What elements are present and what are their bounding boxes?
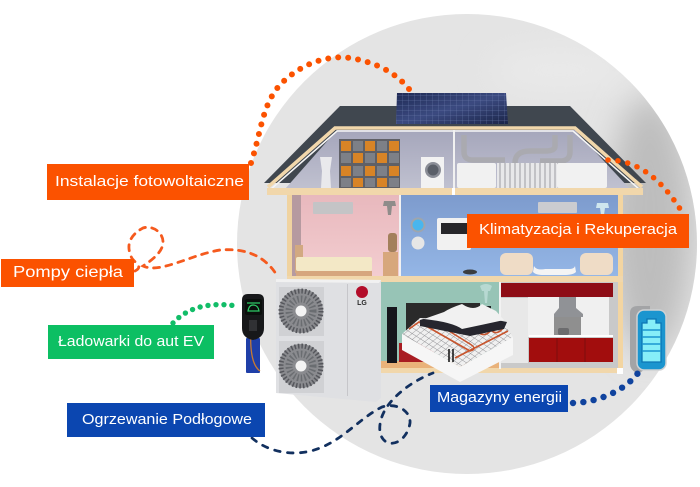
connector: EV chargers [173,305,237,323]
dresser and bear [383,233,398,276]
bed [295,245,372,276]
red bed cover [399,343,434,362]
attic interior [285,130,630,189]
label: energy storage: Magazyny energii [437,389,562,406]
cooker hood [554,297,583,317]
backsplash [554,315,581,335]
recuperator units [457,163,607,188]
battery icon [630,306,666,374]
heating pipes [409,318,508,358]
washing machine [421,157,444,188]
ventilation ducts [464,135,570,163]
connector: heat pumps [129,227,278,277]
connector: photovoltaics [251,57,409,163]
divider kitchen [499,282,501,369]
roof beam [268,128,642,187]
walls and slabs [267,188,643,374]
label: heat pumps [1,259,134,287]
vase [320,157,332,188]
house cross-section [264,93,646,374]
floor layers [420,311,507,336]
bedroom lower level [378,282,499,368]
attic divider [453,130,455,188]
armchairs and table [500,253,613,275]
lower cabinets [529,335,613,362]
label: energy storage [430,385,568,412]
lamp blue room [596,203,609,215]
background circle [237,14,697,474]
air conditioner blue room [538,202,577,213]
EV charger [242,294,264,373]
fridge [501,298,528,363]
underfloor heating block [402,304,513,382]
upper cabinets [501,283,613,297]
speaker [387,307,397,363]
robot vacuum [463,270,477,274]
nightstand [481,306,491,320]
label: underfloor heating [67,403,265,437]
label: EV chargers [48,325,214,359]
heat pump [276,279,381,402]
upper fan [279,287,324,336]
kitchen [501,282,618,368]
solar panel [396,93,508,124]
label: underfloor heating: Ogrzewanie Podłogowe [82,411,252,428]
roof [264,106,646,183]
LG logo: LG [357,300,367,307]
pink room [292,195,399,276]
label: air conditioning: Klimatyzacja i Rekuperacja [479,221,678,238]
headboard [406,303,480,343]
lamp pink room [383,201,396,215]
blue room [401,195,618,276]
label: heat pumps: Pompy ciepła [13,264,123,281]
label: EV chargers: Ładowarki do aut EV [58,333,204,350]
lower fan [279,341,324,393]
sensor [412,236,424,250]
label: air conditioning [467,214,689,248]
bedroom lamp [480,284,492,303]
connector: air conditioning [608,160,682,212]
label: photovoltaics [47,164,249,200]
label: photovoltaics: Instalacje fotowoltaiczne [55,173,244,190]
air conditioner pink room [313,202,353,214]
ground floor back wall [287,195,623,373]
connector: energy storage [573,373,638,403]
wall controller [437,218,471,250]
thermostat [410,218,426,232]
connector: underfloor heating [252,373,433,453]
storage shelf [339,139,400,188]
stove pot [558,328,569,335]
